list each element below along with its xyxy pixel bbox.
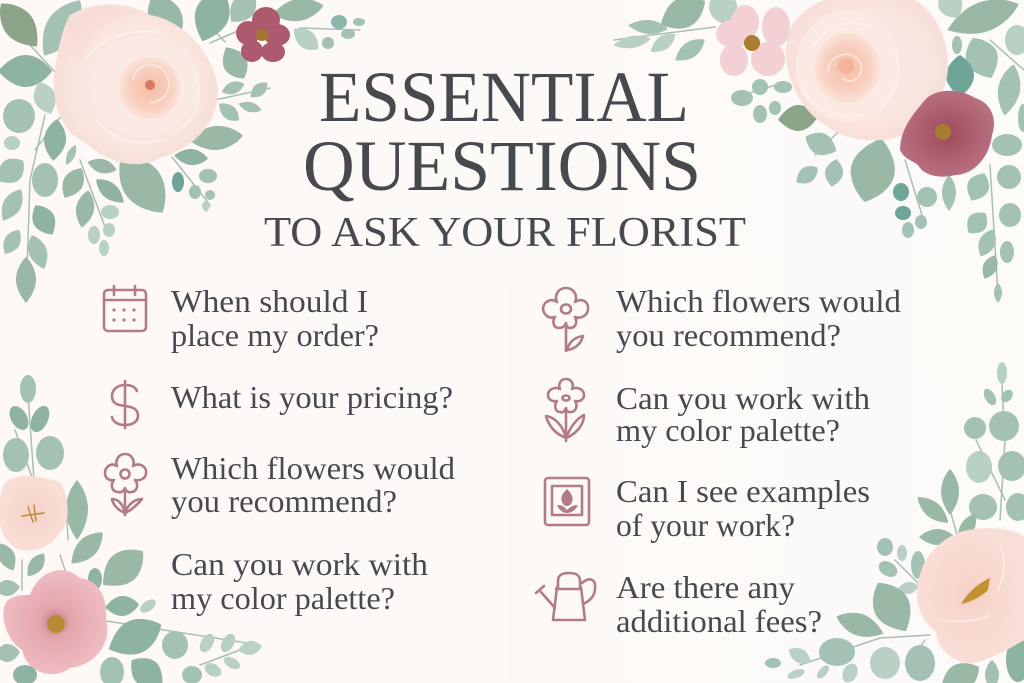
foliage: bottom right leaves xyxy=(765,362,1024,683)
flower: pink blossom xyxy=(3,570,107,674)
question: additional fees: Are there any xyxy=(616,569,795,605)
right column of questions xyxy=(536,283,901,639)
icon: dollar sign xyxy=(112,381,138,428)
question: color palette xyxy=(171,546,428,616)
icon: flower with two large leaves xyxy=(546,379,584,441)
floral corner: bottom right xyxy=(765,362,1024,683)
question: order timing: place my order? xyxy=(171,317,379,353)
flower: small wine blossom xyxy=(236,7,290,62)
question: color palette: my color palette? xyxy=(171,580,395,616)
title: QUESTIONS xyxy=(303,126,701,206)
question: color palette xyxy=(546,379,870,448)
rose: large peach rose xyxy=(786,0,948,140)
flower: light pink blossom xyxy=(716,5,790,76)
flower: blush poppy xyxy=(917,528,1024,663)
question: flower recommendations xyxy=(105,450,455,519)
floral corner: top left xyxy=(0,0,365,303)
icon: flower with one leaf xyxy=(543,288,588,351)
icon: framed flower picture xyxy=(545,478,589,525)
question: portfolio examples xyxy=(545,473,870,543)
title: ESSENTIAL xyxy=(319,57,689,137)
question: additional fees: additional fees? xyxy=(616,603,822,639)
title: TO ASK YOUR FLORIST xyxy=(264,210,746,256)
floral corner: top right xyxy=(612,0,1024,303)
question: additional fees xyxy=(536,569,822,639)
foliage: bottom left leaves xyxy=(0,375,263,683)
floral corner: bottom left xyxy=(0,375,263,683)
question: flower recommendations: you recommend? xyxy=(171,483,397,519)
foliage: top right leaves xyxy=(612,0,1024,303)
icon: flower with two leaves xyxy=(105,454,146,515)
question: pricing: What is your pricing? xyxy=(171,379,453,415)
question: order timing: When should I xyxy=(171,283,368,319)
question: color palette: my color palette? xyxy=(616,412,840,448)
flower: peach blossom xyxy=(0,476,68,551)
question: portfolio examples: of your work? xyxy=(616,507,795,543)
question: portfolio examples: Can I see examples xyxy=(616,473,870,509)
flower: wine camellia xyxy=(900,91,994,177)
question: color palette: Can you work with xyxy=(171,546,428,582)
question: flower recommendations xyxy=(543,283,901,353)
question: flower recommendations: you recommend? xyxy=(616,317,841,353)
foliage: top left leaves xyxy=(0,0,365,303)
question: color palette: Can you work with xyxy=(616,380,870,416)
question: flower recommendations: Which flowers would xyxy=(616,283,901,319)
icon: calendar xyxy=(104,286,146,331)
icon: watering can xyxy=(536,573,595,620)
question: order timing xyxy=(104,283,379,353)
question: flower recommendations: Which flowers would xyxy=(171,450,455,486)
question: pricing xyxy=(112,379,453,428)
left column of questions xyxy=(104,283,455,616)
title xyxy=(264,57,746,256)
rose: large blush rose xyxy=(54,4,218,164)
